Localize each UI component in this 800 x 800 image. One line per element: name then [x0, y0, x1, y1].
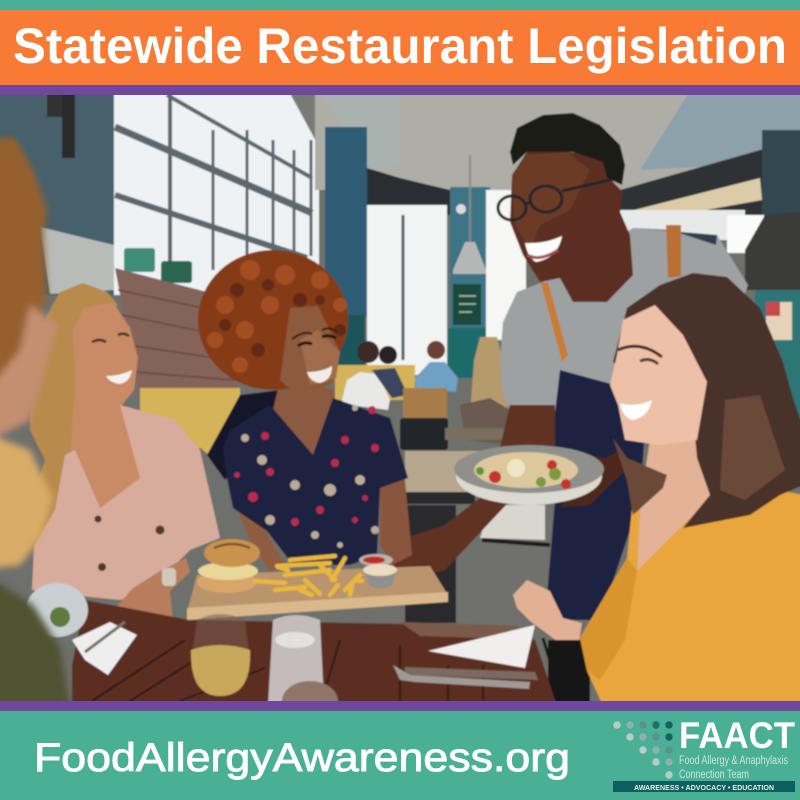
face	[610, 305, 707, 445]
left plate and napkin	[26, 583, 137, 675]
panel: top teal strip	[0, 0, 800, 10]
waiter arm and hand	[390, 405, 555, 580]
wooden serving board	[187, 566, 448, 620]
logo name line 2: Connection Team	[679, 769, 749, 781]
plate of salad	[454, 445, 604, 505]
left hair strand	[613, 438, 667, 515]
person: woman in orange top	[513, 273, 800, 721]
afro hair	[198, 250, 348, 390]
hair	[30, 283, 118, 540]
blouse flowers	[234, 406, 379, 526]
shirt fold	[580, 558, 637, 680]
burger	[197, 539, 260, 593]
waiter shirt	[500, 228, 748, 420]
purple divider top	[0, 85, 800, 95]
background diners	[140, 337, 577, 625]
neck	[272, 388, 336, 455]
shirt buttons	[94, 516, 164, 571]
watch	[162, 568, 176, 586]
person: waiter	[390, 113, 748, 620]
panel: orange title banner	[0, 10, 800, 85]
brows, eyes and smile	[292, 328, 337, 339]
orange shirt	[580, 491, 800, 721]
waiter apron	[547, 370, 644, 620]
waiter smile	[525, 236, 562, 262]
waiter neck and face	[510, 152, 633, 302]
waiter glasses	[498, 180, 610, 220]
floral blouse	[223, 398, 408, 565]
person: woman in pink shirt	[30, 283, 220, 633]
eyes and smile	[92, 334, 129, 342]
FAACT logo	[613, 715, 795, 792]
french fries	[255, 556, 362, 595]
logo wordmark: FAACT	[679, 715, 795, 756]
apron straps	[541, 282, 568, 362]
forearm and hand	[117, 558, 191, 618]
hair highlight	[720, 395, 785, 500]
purple divider bottom	[0, 701, 800, 711]
water glass	[267, 615, 338, 721]
face	[280, 306, 340, 396]
eyebrow, eye and mouth	[618, 346, 662, 357]
title: Statewide Restaurant Legislation	[13, 18, 787, 74]
logo dots	[613, 721, 673, 779]
sauce cups	[359, 554, 397, 588]
website address: FoodAllergyAwareness.org	[34, 736, 570, 780]
hand	[513, 580, 582, 648]
logo tagline bar	[613, 781, 795, 792]
panel: teal footer	[0, 711, 800, 800]
neck and chest	[636, 440, 711, 571]
person: woman with curly hair	[198, 250, 412, 572]
napkin and cutlery right	[393, 625, 538, 689]
dining table	[72, 600, 562, 721]
hair	[613, 273, 800, 528]
arms	[238, 511, 284, 572]
logo tagline: AWARENESS • ADVOCACY • EDUCATION	[634, 783, 774, 792]
face and chest	[70, 302, 140, 508]
foreground person, blurred	[0, 138, 73, 721]
pink shirt	[32, 405, 220, 600]
waiter hair	[510, 113, 625, 185]
wine glass	[191, 614, 250, 696]
